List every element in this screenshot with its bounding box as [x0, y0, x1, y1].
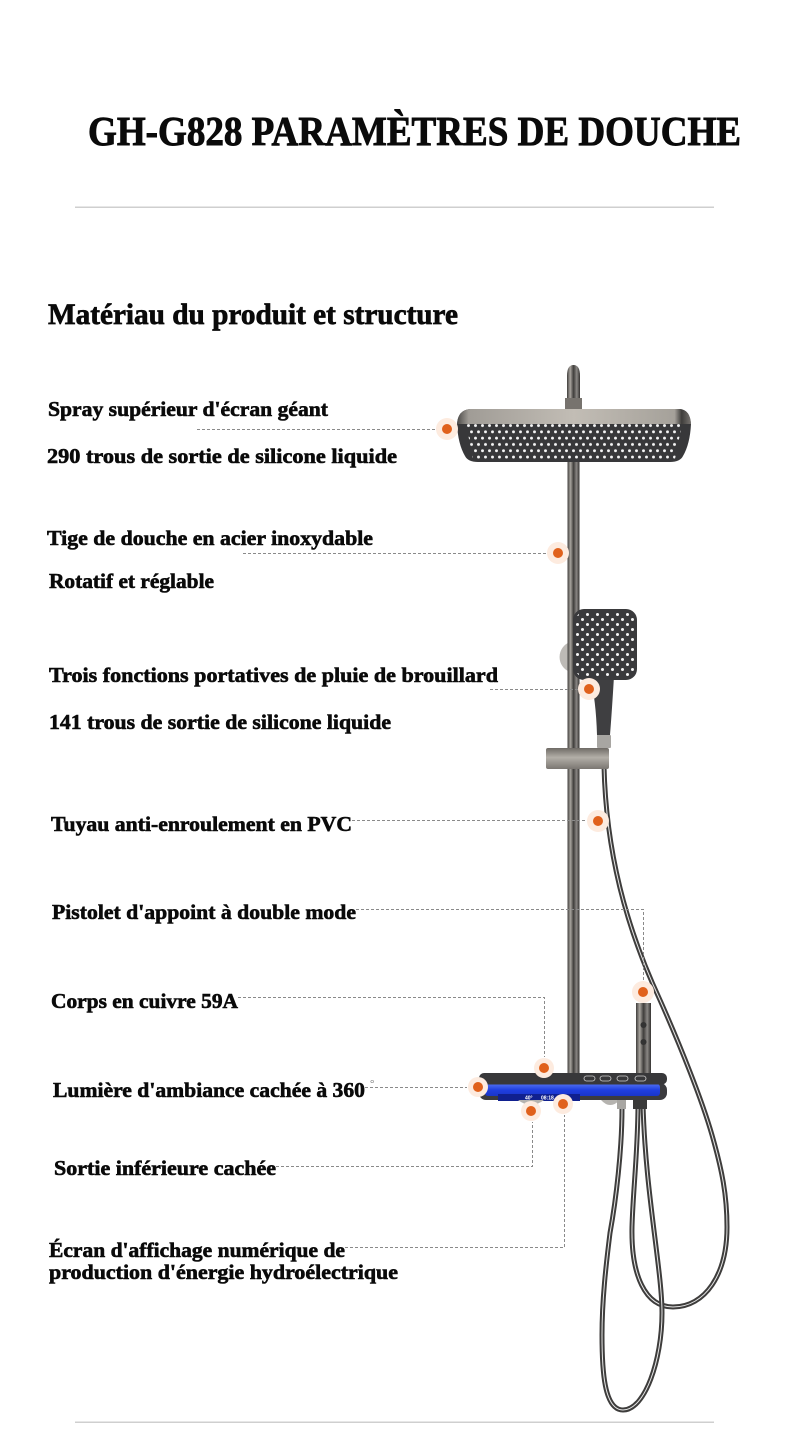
callout: overhead spray: 290 trous de sortie de silicone liquide [47, 444, 397, 468]
vertical shower pole [568, 460, 580, 1074]
title: GH-G828 PARAMÈTRES DE DOUCHE [88, 108, 741, 154]
callout: stainless steel pole: Tige de douche en acier inoxydable [47, 526, 373, 550]
callout: PVC hose: Tuyau anti-enroulement en PVC [51, 812, 352, 836]
callout: copper body [51, 989, 554, 1078]
control shelf: 08:18 [541, 1096, 554, 1102]
callout: ambient light: ° [370, 1078, 374, 1090]
secondary spray gun [636, 1003, 651, 1073]
callout: overhead spray: Spray supérieur d'écran géant [48, 397, 328, 421]
overhead rain shower head [457, 409, 691, 462]
gooseneck [567, 365, 580, 398]
callout: hydro-powered display: Écran d'affichage numérique de [49, 1238, 345, 1262]
callout: ambient light: Lumière d'ambiance cachée à 360 [53, 1078, 365, 1102]
hand shower hose [604, 766, 727, 1307]
callout: hydro-powered display [49, 1094, 573, 1284]
slide bar holder [546, 748, 609, 769]
control shelf [479, 1073, 667, 1109]
gooseneck collar [565, 398, 582, 409]
callout: ambient light [53, 1077, 488, 1102]
lower loop hose [602, 1103, 662, 1410]
control shelf: 40° [525, 1096, 533, 1102]
callout: dual mode spray gun: Pistolet d'appoint à double mode [52, 900, 356, 924]
callout: PVC hose [51, 810, 609, 836]
wall bracket disk [560, 642, 570, 672]
callout: hand shower [49, 663, 600, 734]
shower product illustration [457, 365, 727, 1410]
callout: copper body: Corps en cuivre 59A [51, 989, 239, 1013]
hand shower [546, 609, 637, 769]
callout: hand shower: Trois fonctions portatives de pluie de brouillard [49, 663, 498, 687]
callout: hidden bottom outlet [54, 1101, 541, 1180]
callout: dual mode spray gun [52, 900, 654, 1003]
callout: stainless steel pole [47, 526, 569, 593]
callout: overhead spray [47, 397, 458, 468]
callout: hand shower: 141 trous de sortie de silicone liquide [49, 710, 391, 734]
callout: hidden bottom outlet: Sortie inférieure cachée [54, 1156, 276, 1180]
section heading: Matériau du produit et structure [48, 299, 458, 331]
callout: hydro-powered display: production d'énergie hydroélectrique [49, 1260, 398, 1284]
callout: stainless steel pole: Rotatif et réglable [49, 569, 214, 593]
